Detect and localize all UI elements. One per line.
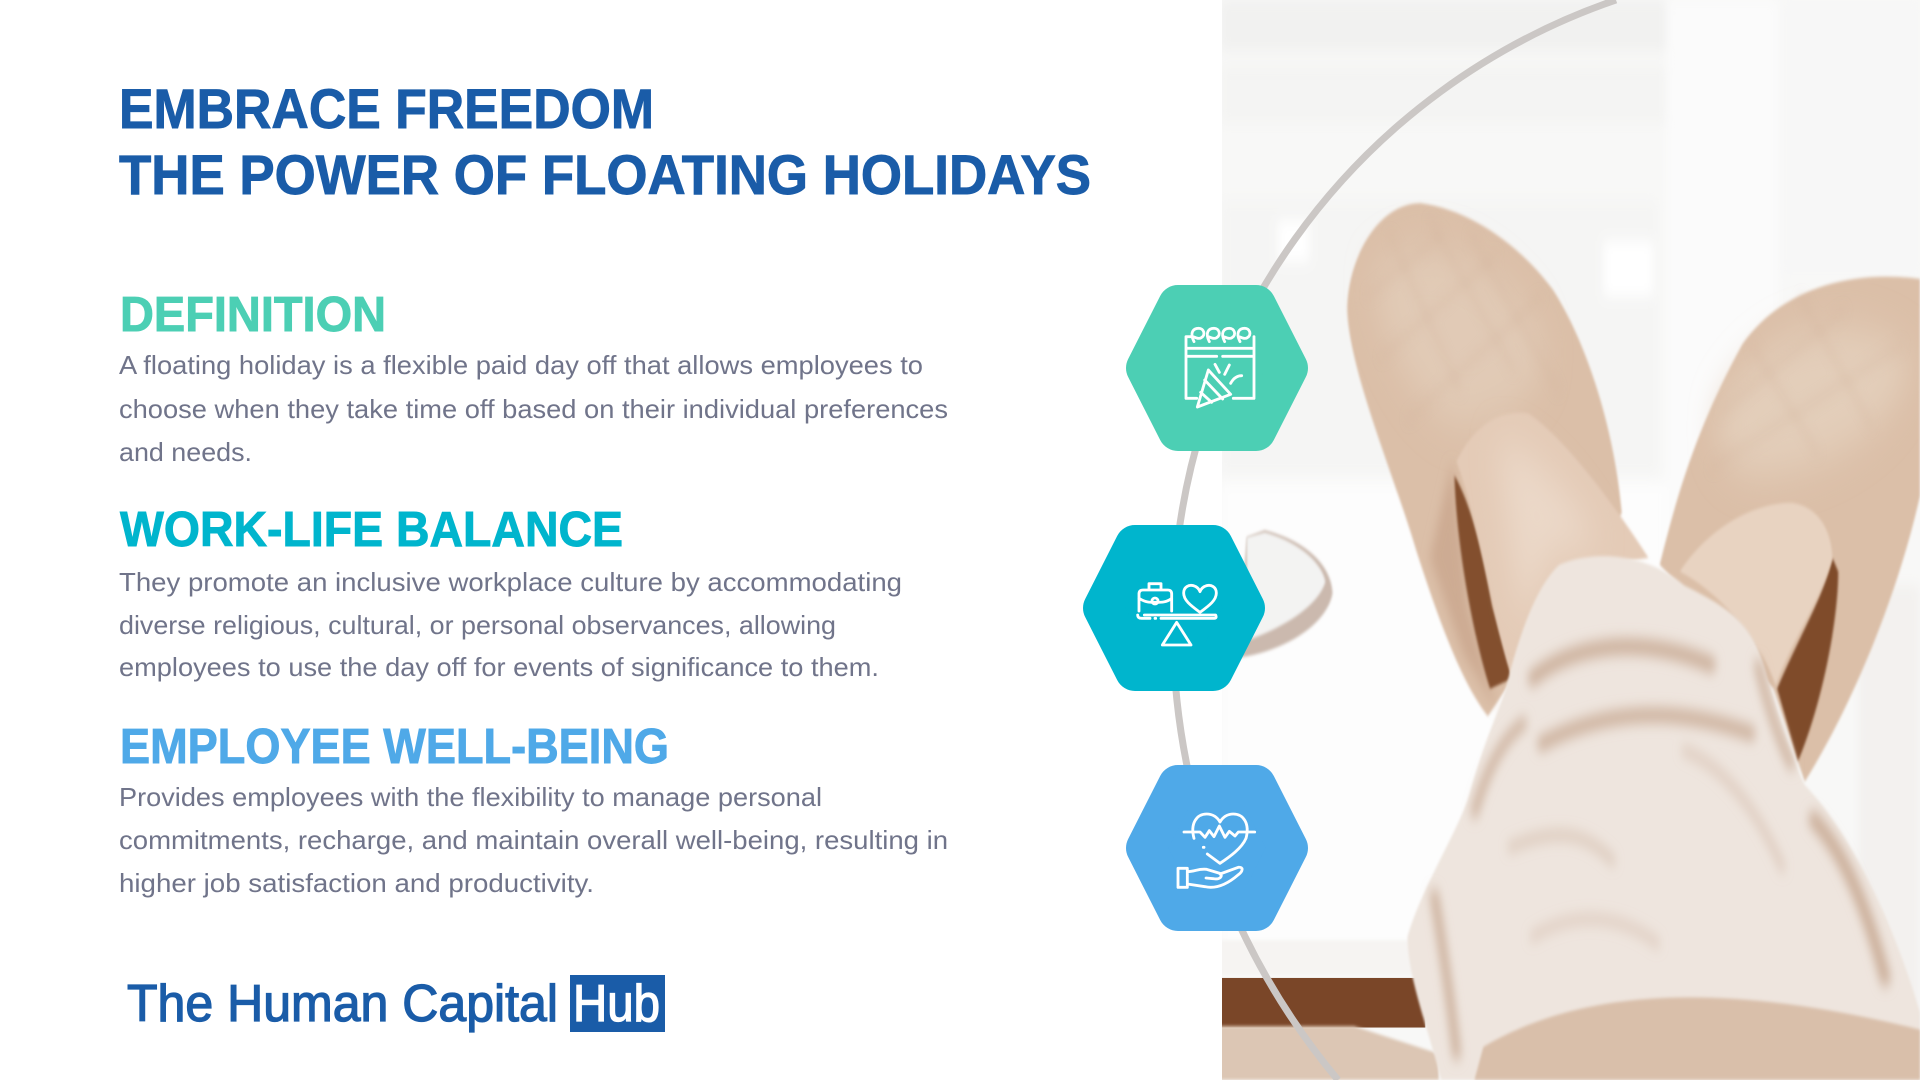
photo: feet in slippers (1220, 0, 1920, 1080)
text: definition body (119, 350, 948, 467)
text: definition body: choose when they take time off based on their individual preferences (119, 394, 948, 424)
text: definition body: A floating holiday is a flexible paid day off that allows employees to (119, 350, 923, 380)
icon hexagon: calendar with party popper (1146, 305, 1288, 431)
text: well-being body (119, 782, 948, 898)
logo: The Human Capital Hub: The Human Capital (127, 975, 558, 1033)
text: work-life body: employees to use the day off for events of significance to them. (119, 652, 879, 682)
heading: definition: DEFINITION (120, 288, 386, 342)
trousers (1407, 556, 1920, 1080)
title (119, 77, 1091, 206)
text: definition body: and needs. (119, 437, 252, 467)
section: definition (119, 288, 948, 467)
text: well-being body: Provides employees with the flexibility to manage personal (119, 782, 822, 812)
curved connector arc (1173, 0, 1616, 1080)
text: work-life body: They promote an inclusive workplace culture by accommodating (119, 567, 902, 597)
section: employee well-being (119, 720, 948, 898)
icon hexagon: heart care in hand (1146, 785, 1288, 911)
logo: The Human Capital Hub: Hub (573, 975, 660, 1033)
text: well-being body: higher job satisfaction and productivity. (119, 868, 594, 898)
right slipper (1660, 277, 1920, 782)
side table disc (1238, 530, 1332, 658)
icon hexagon: work-life balance scale (1103, 545, 1245, 671)
text: work-life body: diverse religious, cultural, or personal observances, allowing (119, 610, 836, 640)
text: work-life body (119, 567, 902, 682)
text: well-being body: commitments, recharge, and maintain overall well-being, resulting in (119, 825, 948, 855)
heading: employee well-being: EMPLOYEE WELL-BEING (120, 720, 669, 774)
left slipper (1347, 203, 1622, 716)
section: work-life balance (119, 503, 902, 682)
heading: work-life balance: WORK-LIFE BALANCE (120, 503, 623, 557)
title: THE POWER OF FLOATING HOLIDAYS (119, 143, 1091, 206)
title: EMBRACE FREEDOM (119, 77, 654, 140)
